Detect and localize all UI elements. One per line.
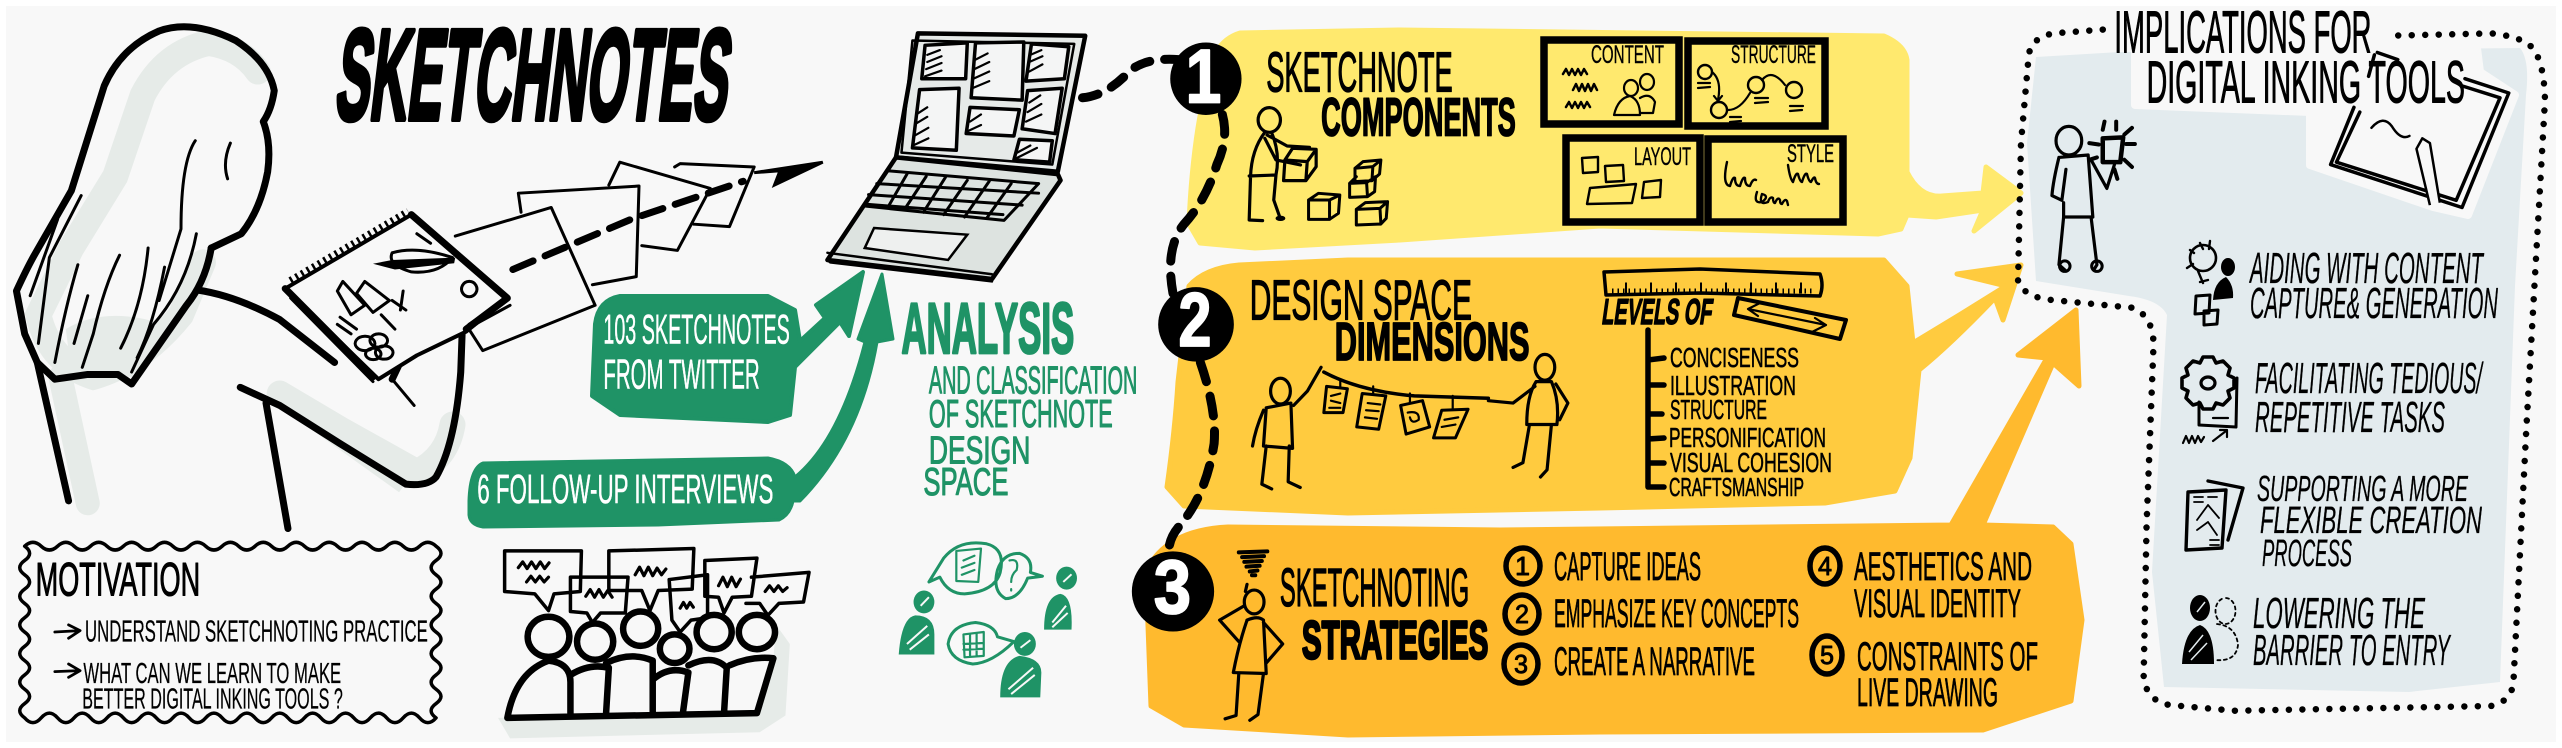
strategy 1: 1	[1515, 551, 1530, 581]
number badge 1: 1	[1186, 35, 1221, 119]
group: left column labels and audience	[20, 305, 809, 738]
figure: person holding up a device	[2052, 122, 2135, 271]
heading: design space dimensions: DESIGN SPACE	[1250, 269, 1472, 332]
ruler	[1604, 269, 1822, 296]
item: supporting a more flexible process	[2186, 468, 2482, 575]
scale with levels list: CONCISENESS	[1670, 342, 1799, 373]
strategy 5: LIVE DRAWING	[1857, 671, 1998, 715]
strategy 4: AESTHETICS AND	[1854, 545, 2032, 589]
group: analysis column	[827, 33, 1568, 720]
dashed connector between laptop and numbers	[1082, 59, 1225, 553]
strategy 4	[1810, 545, 2032, 626]
text block: analysis description: SPACE	[923, 460, 1008, 503]
item: lowering the barrier	[2182, 589, 2451, 675]
item: supporting a more flexible process: PROCESS	[2262, 533, 2352, 575]
strategy 4: VISUAL IDENTITY	[1854, 582, 2021, 626]
strategy 1	[1506, 545, 1701, 589]
box: structure	[1688, 41, 1825, 126]
scale with levels list: PERSONIFICATION	[1669, 422, 1826, 453]
label: 103 sketchnotes from twitter: FROM TWITTER	[603, 351, 760, 398]
number badge 2: 2	[1178, 278, 1211, 363]
heading: sketchnoting strategies	[1280, 558, 1488, 670]
strategies list	[1504, 545, 2038, 715]
heading: sketchnote components: SKETCHNOTE	[1266, 41, 1453, 104]
box: layout: LAYOUT	[1634, 143, 1691, 171]
strategy 5	[1812, 635, 2038, 715]
group: implications content	[2052, 0, 2509, 271]
panel: motivation: BETTER DIGITAL INKING TOOLS ?	[82, 682, 343, 715]
strategy 3: 3	[1514, 649, 1528, 679]
group: analysis column: AND CLASSIFICATION	[929, 358, 1137, 402]
panel: motivation	[20, 542, 441, 723]
heading: design space dimensions	[1250, 269, 1530, 372]
group: left column labels and audience: UNDERSTAND SKETCHNOTING PRACTICE	[85, 614, 428, 648]
box: style	[1708, 139, 1843, 222]
hair and body shading	[38, 43, 453, 503]
sketchbook in hand	[285, 212, 510, 382]
scale with levels list: CRAFTSMANSHIP	[1669, 472, 1804, 502]
icon: green people discussing	[899, 543, 1077, 697]
icon: double arrow box	[1734, 298, 1846, 339]
heading: design space dimensions: DIMENSIONS	[1335, 313, 1530, 372]
item: aiding with content capture	[2187, 241, 2498, 328]
scale with levels list: ILLUSTRATION	[1670, 370, 1796, 401]
flying sheets of paper	[455, 162, 754, 351]
dashed arrow through the papers	[513, 162, 823, 270]
strategy 2: 2	[1515, 599, 1529, 629]
strategies list: CAPTURE IDEAS	[1554, 545, 1701, 589]
scale with levels list	[1648, 330, 1832, 502]
heading: sketchnote components	[1266, 41, 1516, 148]
panel: sketchnote components	[1189, 30, 2021, 248]
heading: levels of: LEVELS OF	[1600, 291, 1716, 332]
box: content	[1544, 40, 1679, 124]
green callout: 6 interviews	[469, 274, 893, 527]
strategy 2	[1505, 592, 1799, 636]
text: SKETCHNOTES	[330, 3, 740, 147]
group: analysis column: SKETCHNOTING	[1280, 558, 1469, 618]
sub-panels in panel 1	[1504, 40, 2038, 715]
text block: analysis description	[923, 358, 1137, 503]
scale with levels list: VISUAL COHESION	[1670, 447, 1832, 478]
text block: analysis description: DESIGN	[929, 428, 1030, 472]
icon: tablet with stylus	[2331, 52, 2509, 207]
text block: analysis description: OF SKETCHNOTE	[929, 392, 1113, 435]
heading: implications for digital inking tools	[2114, 0, 2465, 116]
laptop	[827, 33, 1085, 281]
label: 103 sketchnotes from twitter	[603, 305, 790, 398]
box: content: CONTENT	[1591, 41, 1664, 69]
panel: sketchnoting strategies	[1146, 310, 2082, 735]
bullet: understand sketchnoting practice	[55, 614, 428, 648]
panel: implications background	[2027, 20, 2527, 692]
bullet: what can we learn	[55, 657, 343, 715]
group: analysis column: COMPONENTS	[1321, 88, 1516, 148]
text: 103 SKETCHNOTES	[603, 305, 790, 353]
strategy 3	[1504, 640, 1755, 684]
scale with levels list: STRUCTURE	[1670, 394, 1767, 425]
person: sketching woman	[16, 27, 463, 529]
item: facilitating tedious tasks	[2182, 354, 2484, 443]
number badge 1	[1170, 35, 1242, 119]
figure: thinker with storm cloud	[1220, 551, 1283, 720]
number badge 2	[1158, 278, 1234, 363]
box: style: STYLE	[1787, 140, 1834, 168]
group: left column (person, papers, boxes)	[16, 3, 823, 529]
panel: motivation: MOTIVATION	[36, 552, 200, 606]
group: analysis column: STRATEGIES	[1302, 611, 1488, 670]
implications dotted outline	[2018, 30, 2545, 711]
green callout: 103 sketchnotes	[592, 272, 863, 422]
number badge 3: 3	[1154, 545, 1191, 630]
box: structure: STRUCTURE	[1731, 41, 1816, 69]
strategy 5: 5	[1820, 640, 1834, 670]
figure: two people with washing line of sketches	[1253, 354, 1568, 489]
strategies list: EMPHASIZE KEY CONCEPTS	[1554, 592, 1799, 636]
strategies list: CREATE A NARRATIVE	[1554, 640, 1755, 684]
strategy 5: CONSTRAINTS OF	[1857, 635, 2038, 679]
figure: person stacking boxes	[1249, 108, 1388, 225]
number badge 3	[1132, 545, 1214, 632]
strategy 4: 4	[1818, 551, 1832, 581]
group: analysis column: ANALYSIS	[901, 289, 1074, 369]
bullet: what can we learn: WHAT CAN WE LEARN TO MAKE	[83, 657, 341, 690]
box: layout	[1566, 138, 1700, 222]
panel: design space dimensions	[1167, 260, 2021, 513]
group: left column labels and audience: 6 FOLLOW-UP INTERVIEWS	[477, 467, 773, 513]
audience with speech bubbles	[498, 549, 809, 738]
